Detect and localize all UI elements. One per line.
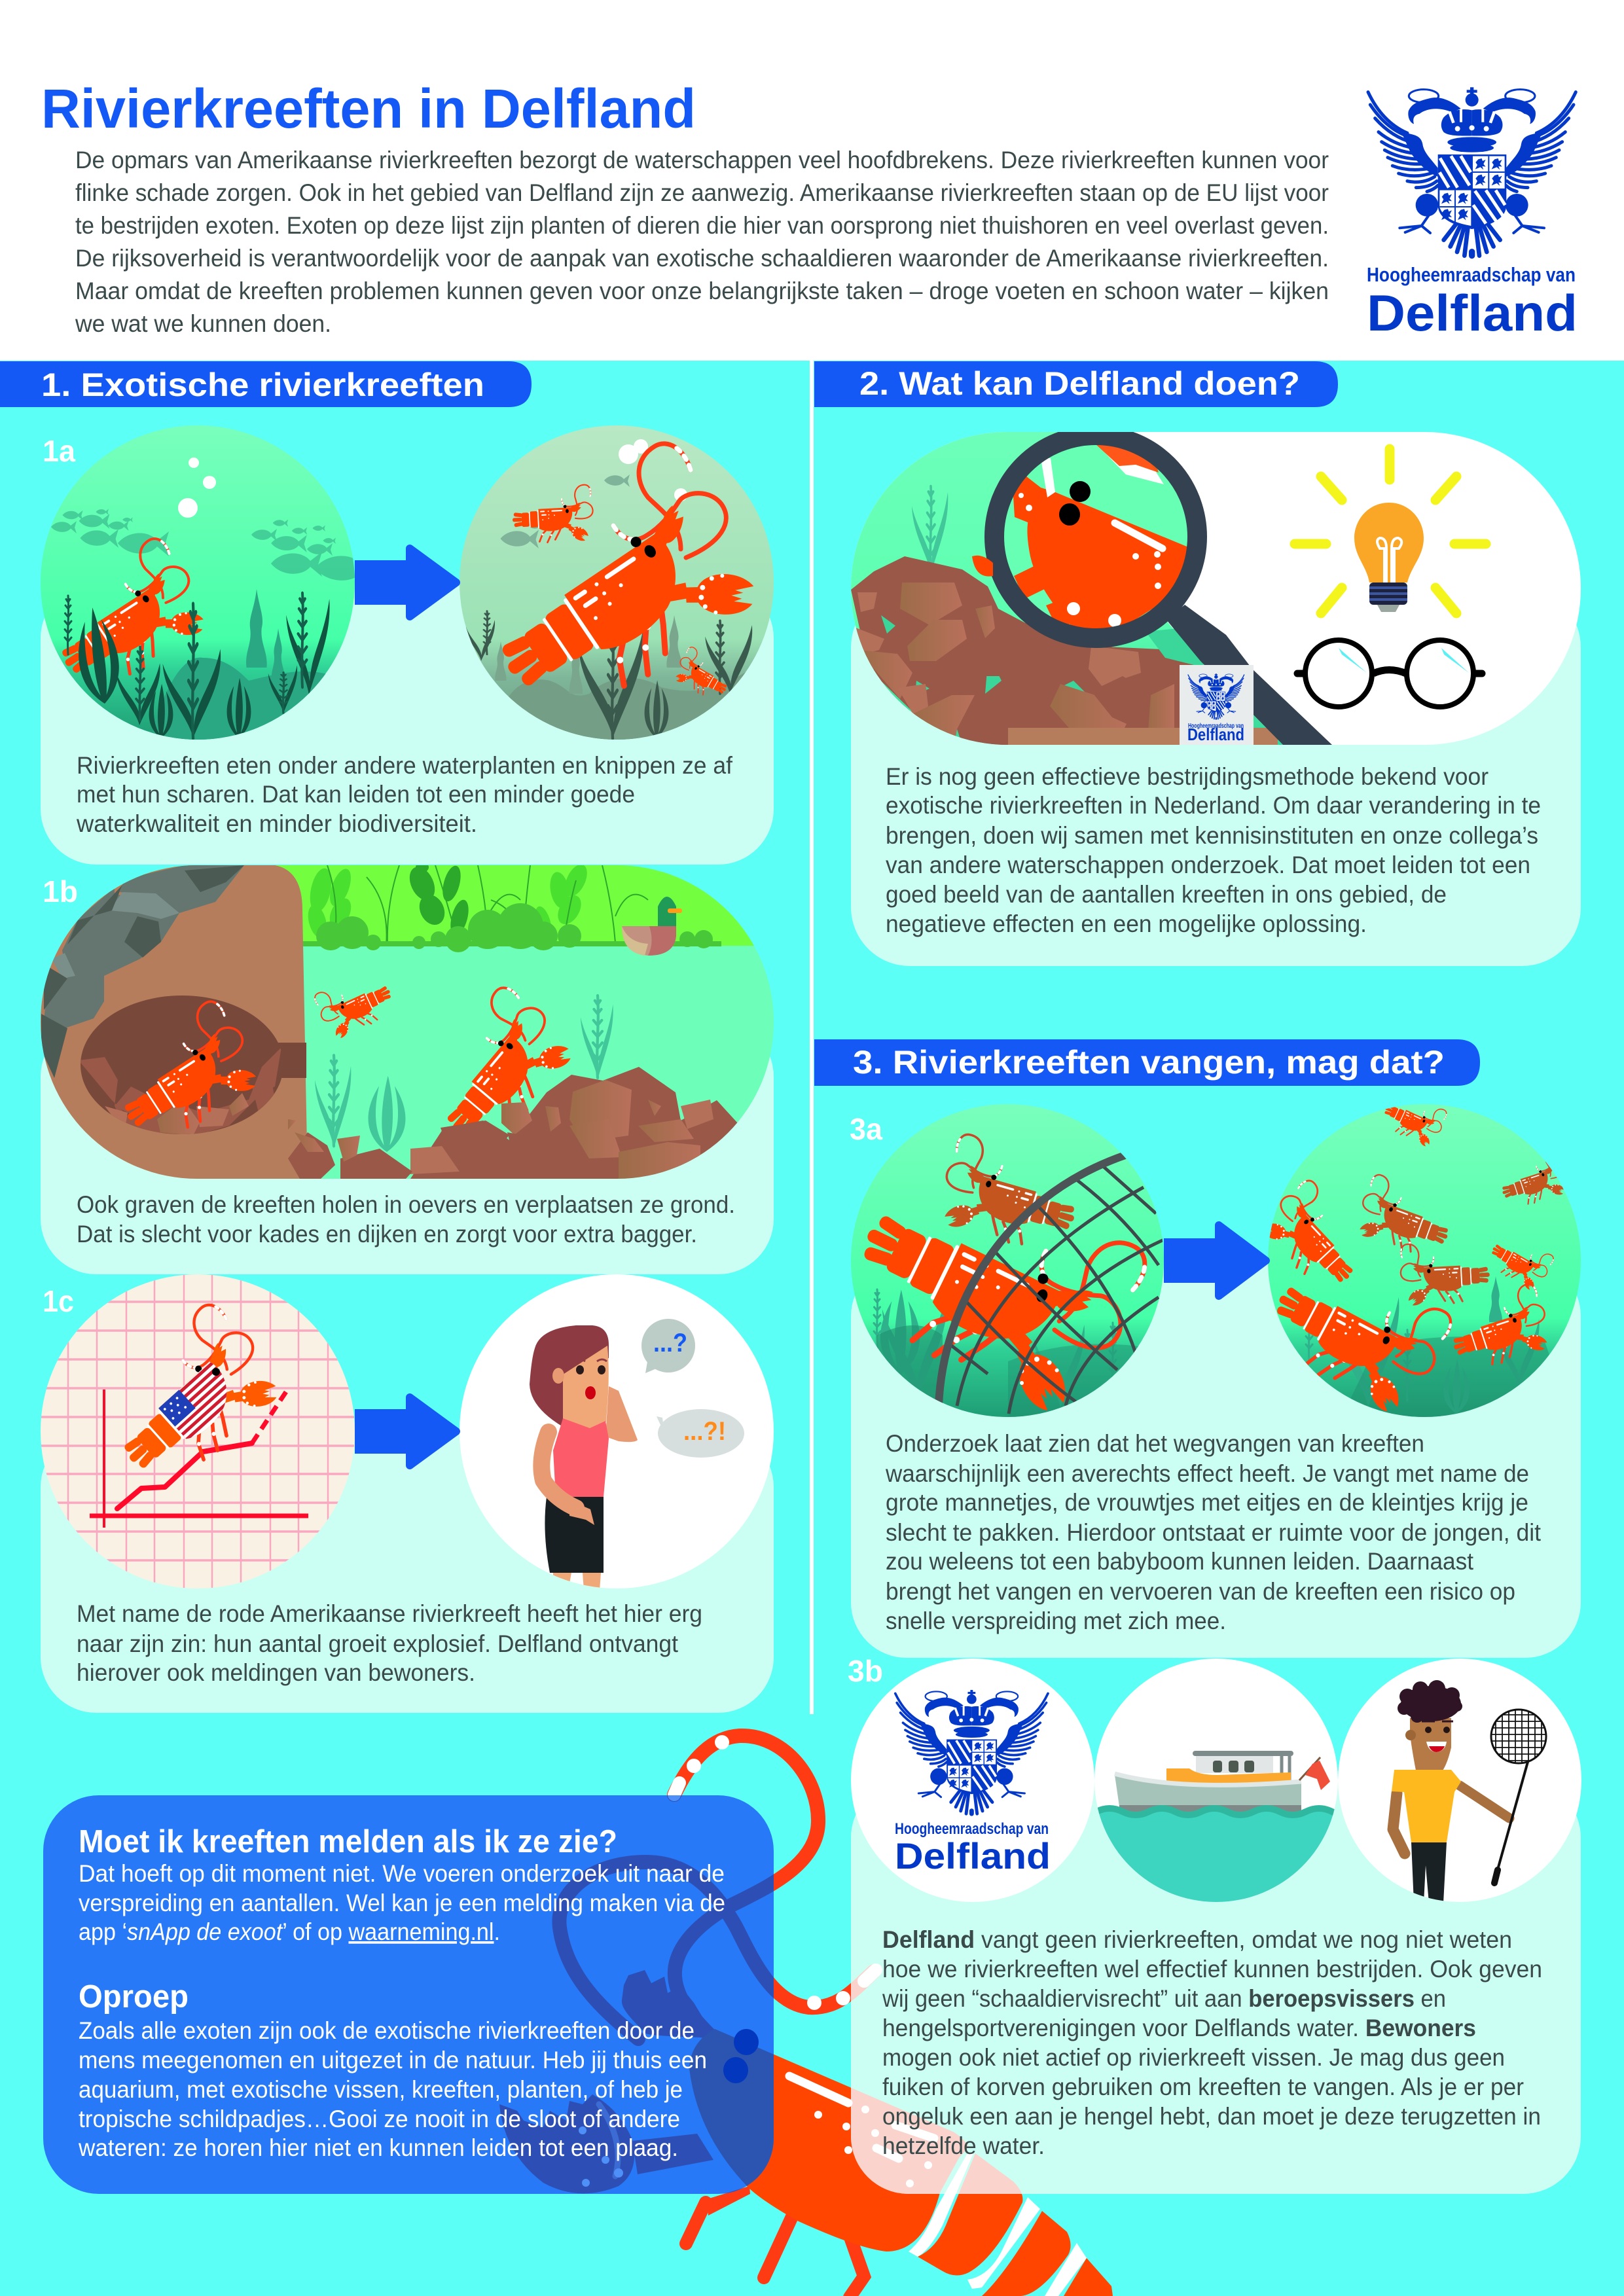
label 1a: 1a	[43, 434, 75, 468]
text 2: van andere waterschappen onderzoek. Dat moet leiden tot een	[886, 852, 1530, 878]
lens view	[1001, 442, 1198, 638]
panel 1b	[41, 861, 774, 1274]
text 2	[886, 763, 1541, 937]
column divider	[810, 359, 814, 1714]
text 2: brengen, doen wij samen met kennisinstituten en onze collega’s	[886, 822, 1538, 849]
text 3a: brengt het vangen en vervoeren van de kreeften een risico op	[886, 1578, 1515, 1605]
text: melden	[79, 1860, 725, 1945]
heading 3: 3. Rivierkreeften vangen, mag dat?	[853, 1044, 1445, 1081]
green shrub behind handle	[1146, 628, 1204, 668]
intro text	[75, 147, 1329, 337]
label 1c: 1c	[43, 1284, 74, 1318]
text 2: exotische rivierkreeften in Nederland. Om daar verandering in te	[886, 792, 1541, 819]
text 1a	[76, 752, 733, 837]
text: oproep: mens meegenomen en uitgezet in de natuur. Heb jij thuis een	[79, 2047, 707, 2073]
big crayfish behind panels	[499, 1735, 1113, 2296]
speech bubble: exclamation	[657, 1409, 744, 1458]
label 3b: 3b	[848, 1654, 883, 1688]
circle: fishing boat	[1087, 1659, 1358, 1911]
heading 1	[0, 361, 532, 407]
label 1b: 1b	[43, 874, 78, 908]
burrow	[81, 996, 283, 1134]
text 3b	[882, 1926, 1542, 2159]
text 3b: Delfland vangt geen rivierkreeften, omdat we nog niet weten	[882, 1926, 1512, 1953]
circle: man with landing net	[1338, 1659, 1581, 1903]
scene: burrow and pond	[41, 861, 774, 1179]
text 1b	[77, 1191, 735, 1247]
sign: Delfland: Hoogheemraadschap van	[1188, 723, 1244, 730]
intro text: Maar omdat de kreeften problemen kunnen geven voor onze belangrijkste taken – droge voeten en schoon water – kijken	[75, 278, 1329, 304]
text 3a: snelle verspreiding met zich mee.	[886, 1607, 1226, 1634]
sign: Delfland	[1180, 665, 1254, 754]
text 1c	[77, 1600, 702, 1686]
text 2: negatieve effecten en een mogelijke oplossing.	[886, 910, 1367, 937]
text 2: goed beeld van de aantallen kreeften in ons gebied, de	[886, 881, 1447, 908]
sign: Delfland: Delfland	[1187, 725, 1244, 744]
circle: Delfland logo: Delfland	[895, 1835, 1051, 1876]
text: oproep: wateren: ze horen hier niet en kunnen leiden tot een plaag.	[78, 2134, 678, 2161]
arrow	[355, 548, 456, 617]
duck	[622, 897, 682, 956]
text 1b: Dat is slecht voor kades en dijken en zorgt voor extra bagger.	[77, 1221, 697, 1247]
panel 2	[851, 432, 1581, 966]
text 1c: Met name de rode Amerikaanse rivierkreeft heeft het hier erg	[77, 1600, 702, 1627]
label 3a: 3a	[850, 1112, 882, 1146]
scene: many crayfish remaining	[1244, 1082, 1582, 1437]
speech bubble: question	[641, 1319, 695, 1373]
arrow	[1164, 1225, 1266, 1296]
heading 2	[814, 361, 1338, 407]
text 3a	[885, 1430, 1542, 1634]
intro text: De rijksoverheid is verantwoordelijk voor de aanpak van exotische schaaldieren waaronder de Amerikaanse rivierkreeften.	[75, 245, 1329, 272]
panel 3b	[499, 1654, 1581, 2296]
text: oproep: tropische schildpadjes…Gooi ze nooit in de sloot of andere	[79, 2106, 680, 2132]
text 1c: hierover ook meldingen van bewoners.	[77, 1659, 475, 1686]
text 1a: met hun scharen. Dat kan leiden tot een minder goede	[77, 781, 635, 808]
landing net	[1491, 1708, 1546, 1883]
heading 2: 2. Wat kan Delfland doen?	[859, 365, 1300, 402]
text 3b: wij geen “schaaldiervisrecht” uit aan beroepsvissers en	[882, 1985, 1446, 2012]
text: melden: app ‘snApp de exoot’ of op waarneming.nl.	[79, 1918, 500, 1945]
intro text: De opmars van Amerikaanse rivierkreeften bezorgt de waterschappen veel hoofdbrekens. Deze rivierkreeften kunnen voor	[75, 147, 1329, 173]
logo: Hoogheemraadschap van Delfland: Delfland	[1367, 284, 1578, 342]
circle: Delfland logo	[851, 1659, 1094, 1902]
panel 1a	[41, 425, 774, 865]
trap net	[939, 1155, 1164, 1414]
text 3a: zou weleens tot een babyboom kunnen leiden. Daarnaast	[886, 1548, 1474, 1575]
text: oproep: aquarium, met exotische vissen, kreeften, planten, of heb je	[79, 2076, 683, 2103]
text 3b: hoe we rivierkreeften wel effectief kunnen bestrijden. Ook geven	[882, 1956, 1542, 1982]
logo: Hoogheemraadschap van Delfland	[1367, 87, 1578, 342]
text 1b: Ook graven de kreeften holen in oevers en verplaatsen ze grond.	[77, 1191, 735, 1218]
panel 3a	[829, 1082, 1582, 1658]
text 3b: mogen ook niet actief op rivierkreeft vissen. Je mag dus geen	[882, 2044, 1505, 2071]
flag on crayfish	[158, 1361, 226, 1439]
text 1c: naar zijn zin: hun aantal groeit explosief. Delfland ontvangt	[77, 1630, 679, 1657]
speech bubble: question: ...?	[653, 1329, 687, 1357]
scene: surprised resident	[460, 1274, 774, 1590]
scene: healthy water with crayfish	[41, 425, 355, 740]
text 3a: grote mannetjes, de vrouwtjes met eitjes en de kleintjes krijg je	[886, 1489, 1528, 1516]
lightbulb	[1295, 449, 1486, 613]
heading: oproep: Oproep	[79, 1979, 189, 2015]
scene: damaged water with crayfish	[460, 425, 774, 740]
text: oproep	[78, 2017, 707, 2161]
foliage on the bank	[302, 861, 721, 952]
text 3b: hengelsportverenigingen voor Delflands water. Bewoners	[882, 2015, 1476, 2041]
logo: Hoogheemraadschap van Delfland: Hoogheemraadschap van	[1367, 263, 1576, 286]
glasses	[1297, 640, 1482, 707]
intro text: te bestrijden exoten. Exoten op deze lijst zijn planten of dieren die hier van oorsprong niet thuishoren en veel overlast geven.	[75, 212, 1329, 239]
text: oproep: Zoals alle exoten zijn ook de exotische rivierkreeften door de	[79, 2017, 695, 2044]
text 3b: ongeluk een aan je hengel hebt, dan moet je deze terugzetten in	[882, 2103, 1541, 2130]
text 3b: hetzelfde water.	[882, 2132, 1045, 2159]
earth bank	[41, 865, 308, 1179]
scene: magnifier on rocks with lightbulb and glasses	[851, 432, 1581, 754]
speech bubble: exclamation: ...?!	[683, 1417, 726, 1446]
rocks	[851, 556, 1278, 745]
heading 1: 1. Exotische rivierkreeften	[41, 367, 484, 403]
claw outside lens	[972, 556, 993, 577]
title: Rivierkreeften in Delfland	[41, 78, 696, 139]
text 3a: Onderzoek laat zien dat het wegvangen van kreeften	[886, 1430, 1424, 1457]
text 2: Er is nog geen effectieve bestrijdingsmethode bekend voor	[886, 763, 1489, 790]
scene: growth chart with American crayfish	[39, 1270, 357, 1590]
text 1a: Rivierkreeften eten onder andere waterplanten en knippen ze af	[77, 752, 733, 779]
rock pile	[288, 1067, 738, 1179]
plants in pond	[315, 996, 613, 1152]
heading: moet ik kreeften melden: Moet ik kreeften melden als ik ze zie?	[79, 1824, 617, 1859]
text 3b: fuiken of korven gebruiken om kreeften te vangen. Als je er per	[882, 2073, 1524, 2100]
panel 1c	[39, 1270, 774, 1713]
heading 3	[814, 1039, 1480, 1086]
arrow	[355, 1397, 456, 1465]
text: melden: verspreiding en aantallen. Wel kan je een melding maken via de	[79, 1890, 725, 1916]
info panel: melden en oproep	[43, 1735, 1113, 2296]
circle: Delfland logo: Hoogheemraadschap van	[895, 1820, 1049, 1838]
scene: crayfish caught in a trap	[829, 1104, 1201, 1449]
text 3a: waarschijnlijk een averechts effect heeft. Je vangt met name de	[885, 1460, 1529, 1487]
woman	[530, 1325, 638, 1590]
intro text: we wat we kunnen doen.	[75, 310, 331, 337]
grey rocks	[41, 865, 244, 1078]
intro text: flinke schade zorgen. Ook in het gebied van Delfland zijn ze aanwezig. Amerikaanse rivierkreeften staan op de EU lijst voor	[75, 179, 1329, 206]
text 3a: slecht te pakken. Hierdoor ontstaat er ruimte voor de jongen, dit	[886, 1519, 1542, 1546]
text: melden: Dat hoeft op dit moment niet. We voeren onderzoek uit naar de	[79, 1860, 725, 1887]
text 1a: waterkwaliteit en minder biodiversiteit.	[76, 810, 477, 837]
handle	[1166, 605, 1332, 745]
